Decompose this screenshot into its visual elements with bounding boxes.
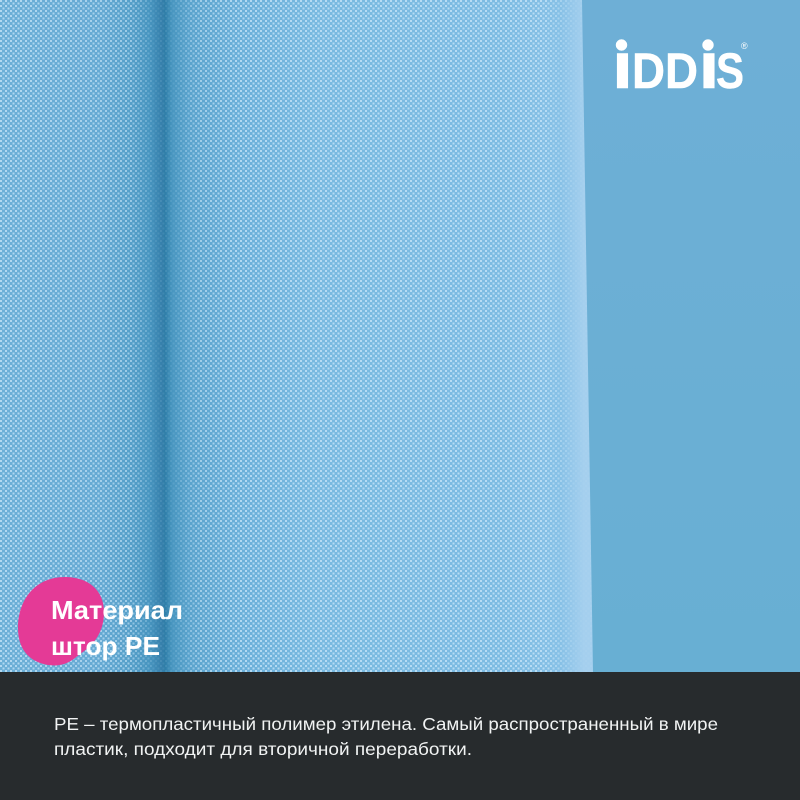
heading — [51, 595, 183, 661]
brand logo: D — [632, 43, 665, 99]
description text: пластик, подходит для вторичной переработки. — [54, 739, 472, 759]
brand logo: I — [699, 43, 719, 99]
brand logo: S — [716, 43, 744, 99]
pink blob behind heading — [18, 577, 104, 665]
heading: штор PE — [51, 631, 160, 661]
brand logo — [612, 40, 748, 99]
bottom dark panel — [0, 672, 800, 800]
brand logo: D — [665, 43, 698, 99]
right fabric fold — [582, 0, 800, 672]
description text: PE – термопластичный полимер этилена. Самый распространенный в мире — [54, 714, 718, 734]
brand logo: I — [612, 43, 632, 99]
heading: Материал — [51, 595, 183, 625]
description text — [54, 714, 718, 759]
brand logo: ® — [741, 41, 748, 51]
